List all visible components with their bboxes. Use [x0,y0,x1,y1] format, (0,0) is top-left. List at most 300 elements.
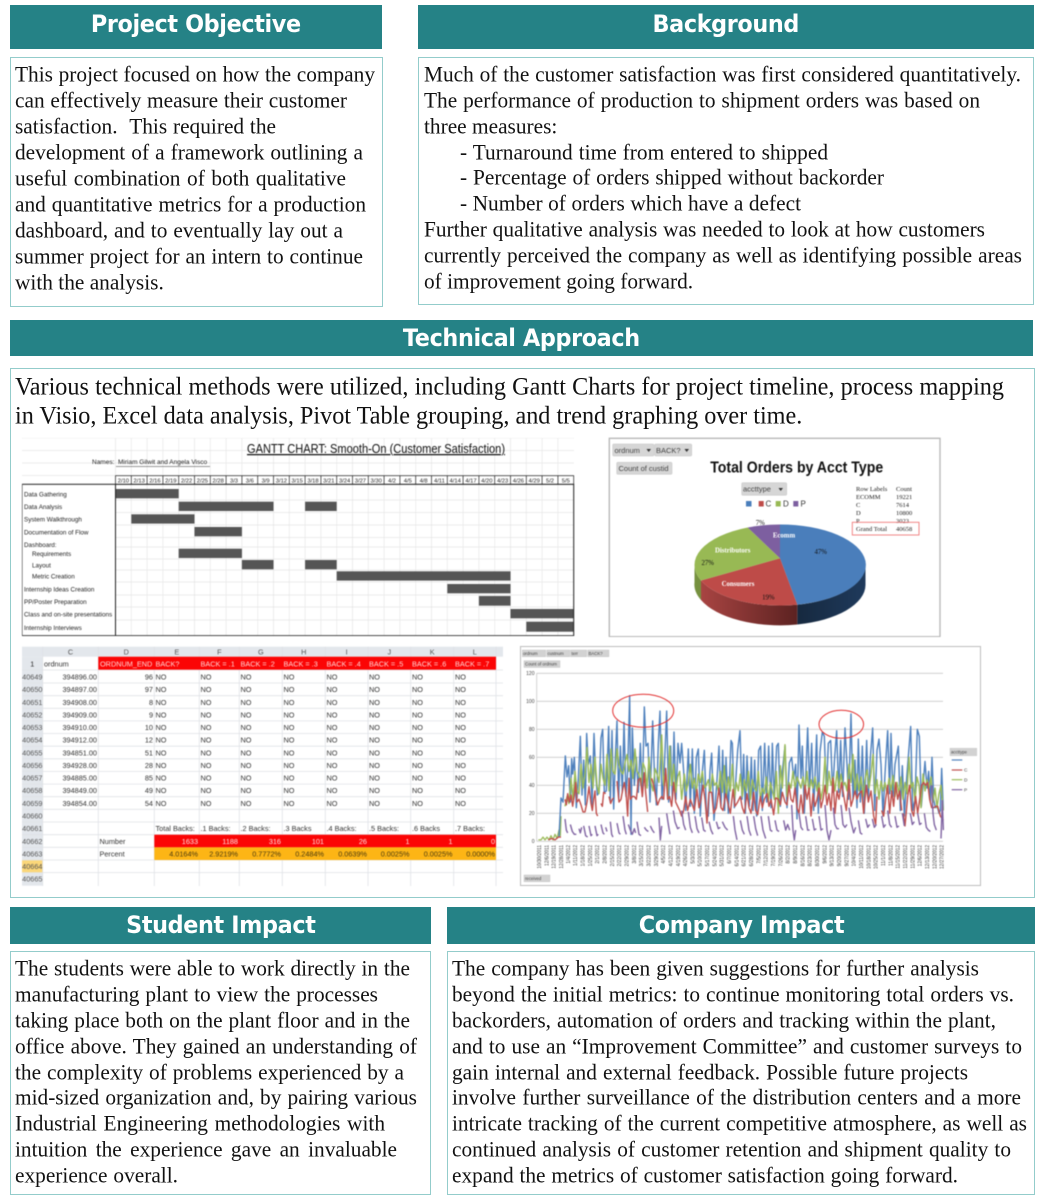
chart: orders over time line chart: 3/15/2012 [639,845,645,866]
table: Excel backorder spreadsheet: ORDNUM_END [100,660,152,668]
table: Excel backorder spreadsheet: 40652 [22,710,42,719]
chart: Gantt chart: Class and on-site presentations [24,611,112,618]
chart: pie chart Total Orders by Acct Type: 40658 [896,526,912,533]
chart: orders over time line chart: BACK? [588,651,603,656]
panel: Project Objective text [10,57,383,307]
chart: orders over time line chart: 12/19/2011 [552,845,558,869]
chart: Gantt chart: 3/21 [323,478,334,484]
chart: orders over time line chart: 2/15/2012 [610,845,616,866]
chart: orders over time line chart: 2/29/2012 [624,845,630,866]
table: Excel backorder spreadsheet: 96 [145,672,153,682]
chart: orders over time line chart: 11/15/2012 [896,845,902,869]
table: Excel backorder spreadsheet: .1 Backs: [200,824,231,833]
table: Excel backorder spreadsheet: NO [200,736,212,745]
chart: Gantt chart: 4/23 [497,478,508,484]
chart: pie chart Total Orders by Acct Type: D [783,500,789,508]
table: Excel backorder spreadsheet: 394849.00 [62,786,97,795]
table: Excel backorder spreadsheet: NO [412,710,423,719]
chart: pie chart Total Orders by Acct Type: 19% [762,594,775,602]
chart: pie chart Total Orders by Acct Type: 3023 [896,518,909,525]
panel: Project Objective text: useful combination of both qualitative [15,165,346,191]
table: Excel backorder spreadsheet: 51 [145,748,153,757]
panel: Student Impact text: intuition the experience gave an invaluable [15,1136,397,1162]
chart: Gantt chart: 2/10 [118,478,129,484]
table: Excel backorder spreadsheet: NO [240,748,252,757]
table: Excel backorder spreadsheet: NO [156,710,167,719]
chart: pie chart Total Orders by Acct Type [608,437,942,638]
chart: pie chart Total Orders by Acct Type: accttype [743,484,771,494]
heading: Student Impact [10,907,431,944]
panel: Project Objective text: This project focused on how the company [15,61,375,87]
table: Excel backorder spreadsheet: G [258,648,264,656]
table: Excel backorder spreadsheet: NO [200,799,212,808]
table: Excel backorder spreadsheet: NO [240,710,252,719]
table: Excel backorder spreadsheet: BACK? [156,660,179,668]
table: Excel backorder spreadsheet: 40655 [22,748,42,757]
table: Excel backorder spreadsheet: NO [240,736,252,745]
chart: Gantt chart: 4/5 [404,478,412,484]
chart: pie chart Total Orders by Acct Type: D [856,510,861,517]
heading: Company Impact: Company Impact [638,911,844,939]
table: Excel backorder spreadsheet: NO [455,723,466,732]
table: Excel backorder spreadsheet: NO [369,710,380,719]
chart: Gantt chart: 4/11 [434,478,445,484]
table: Excel backorder spreadsheet: 1 [448,837,452,846]
table: Excel backorder spreadsheet: NO [412,723,423,732]
chart: Gantt chart: 4/8 [420,478,428,484]
table: Excel backorder spreadsheet: NO [326,710,338,719]
table: Excel backorder spreadsheet: NO [240,786,252,795]
table: Excel backorder spreadsheet: NO [200,774,212,783]
chart: pie chart Total Orders by Acct Type: P [800,500,806,508]
chart: orders over time line chart: 5/31/2012 [720,845,726,866]
table: Excel backorder spreadsheet: Percent [100,849,125,858]
chart: orders over time line chart: 1/25/2012 [588,845,594,866]
table: Excel backorder spreadsheet: ordnum [44,660,69,668]
table: Excel backorder spreadsheet: NO [455,685,466,694]
panel: Project Objective text: can effectively measure their customer [15,87,347,113]
table: Excel backorder spreadsheet [21,646,504,886]
chart: Gantt chart: GANTT CHART: Smooth-On (Customer Satisfaction) [247,442,505,456]
panel: Project Objective text: development of a framework outlining a [15,139,363,165]
table: Excel backorder spreadsheet: NO [200,761,212,770]
chart: orders over time line chart: 40 [529,783,535,789]
chart: pie chart Total Orders by Acct Type: P [856,518,860,525]
table: Excel backorder spreadsheet: NO [240,799,252,808]
table: Excel backorder spreadsheet: NO [455,672,466,682]
table: Excel backorder spreadsheet: NO [326,786,338,795]
table: Excel backorder spreadsheet: NO [412,748,423,757]
table: Excel backorder spreadsheet: 40664 [22,862,42,871]
table: Excel backorder spreadsheet: NO [369,774,380,783]
heading: Background: Background [653,10,799,38]
chart: Gantt chart: 4/20 [481,478,492,484]
table: Excel backorder spreadsheet: 0.0025% [381,849,410,858]
table: Excel backorder spreadsheet: NO [326,774,338,783]
chart: orders over time line chart: 4/5/2012 [661,845,667,864]
table: Excel backorder spreadsheet: 10 [145,723,153,732]
table: Excel backorder spreadsheet: NO [284,710,295,719]
table: Excel backorder spreadsheet: 0.7772% [252,849,282,858]
chart: Gantt chart: Requirements [32,551,71,558]
table: Excel backorder spreadsheet: NO [326,685,338,694]
chart: orders over time line chart: 8/16/2012 [800,845,806,866]
chart: orders over time line chart: 4/12/2012 [668,845,674,866]
table: Excel backorder spreadsheet: NO [156,748,167,757]
chart: pie chart Total Orders by Acct Type: 19221 [896,494,912,501]
chart: orders over time line chart: 9/13/2012 [830,845,836,866]
table: Excel backorder spreadsheet: NO [284,736,295,745]
chart: orders over time line chart: 10/11/2012 [859,845,865,869]
chart: Gantt chart: 2/22 [181,478,192,484]
table: Excel backorder spreadsheet: NO [369,761,380,770]
chart: orders over time line chart: 8/23/2012 [808,845,814,866]
table: Excel backorder spreadsheet: I [346,648,348,656]
table: Excel backorder spreadsheet: 394910.00 [62,723,97,732]
table: Excel backorder spreadsheet: 40650 [22,685,42,694]
chart: Gantt chart: 2/13 [134,478,145,484]
chart: orders over time line chart [520,646,982,886]
text block: technical methods [15,372,1004,430]
panel: Company Impact text: gain internal and external feedback. Possible future projects [452,1059,968,1085]
text block: technical methods: in Visio, Excel data analysis, Pivot Table grouping, and trend graphing over time. [15,401,802,430]
table: Excel backorder spreadsheet: BACK = .2 [240,660,275,668]
table: Excel backorder spreadsheet: 40649 [22,672,42,682]
table: Excel backorder spreadsheet: NO [369,786,380,795]
heading: Technical Approach: Technical Approach [403,324,640,352]
table: Excel backorder spreadsheet: NO [284,748,295,757]
chart: orders over time line chart: 4/19/2012 [676,845,682,866]
table: Excel backorder spreadsheet: NO [156,698,167,707]
panel: Student Impact text: experience overall. [15,1162,178,1188]
chart: orders over time line chart: 3/22/2012 [646,845,652,866]
table: Excel backorder spreadsheet: F [217,648,222,656]
chart: Gantt chart: 3/24 [339,478,351,484]
panel: Company Impact text: and to use an “Improvement Committee” and customer surveys to [452,1033,1022,1059]
table: Excel backorder spreadsheet: BACK = .7 [455,660,489,668]
chart: orders over time line chart: 7/5/2012 [756,845,762,864]
panel: Project Objective text: summer project for an intern to continue [15,243,363,269]
chart: orders over time line chart: 10/4/2012 [852,845,858,866]
chart: orders over time line chart: 5/24/2012 [712,845,718,866]
table: Excel backorder spreadsheet: 40659 [22,799,42,808]
table: Excel backorder spreadsheet: NO [200,698,212,707]
table: Excel backorder spreadsheet: NO [455,761,466,770]
chart: orders over time line chart: 2/1/2012 [595,845,601,864]
panel: Background text: Further qualitative analysis was needed to look at how customers [424,216,985,242]
table: Excel backorder spreadsheet: NO [240,672,252,682]
chart: orders over time line chart: 5/10/2012 [698,845,704,866]
chart: Gantt chart: System Walkthrough [24,517,82,524]
table: Excel backorder spreadsheet: 394897.00 [62,685,97,694]
table: Excel backorder spreadsheet: NO [412,685,423,694]
chart: pie chart Total Orders by Acct Type: Total Orders by Acct Type [710,460,883,476]
chart: Gantt chart: 4/2 [388,478,396,484]
text block: technical methods: Various technical methods were utilized, including Gantt Charts for project timeline, process mapping [15,372,1004,401]
table: Excel backorder spreadsheet: 1 [30,660,34,668]
chart: orders over time line chart: 11/22/2012 [903,845,909,869]
chart: orders over time line chart: 5/3/2012 [690,845,696,864]
table: Excel backorder spreadsheet: 40660 [22,812,42,820]
table: Excel backorder spreadsheet: J [387,648,391,656]
chart: orders over time line chart: D [964,777,968,783]
chart: orders over time line chart: 2/22/2012 [617,845,623,866]
table: Excel backorder spreadsheet: NO [156,736,167,745]
table: Excel backorder spreadsheet: 394909.00 [62,710,97,719]
chart: Gantt chart: 4/29 [529,478,540,484]
table: Excel backorder spreadsheet: NO [412,786,423,795]
table: Excel backorder spreadsheet: 40656 [22,761,42,770]
chart: orders over time line chart: 8/30/2012 [815,845,821,866]
chart: orders over time line chart: 9/6/2012 [822,845,828,864]
table: Excel backorder spreadsheet: NO [284,672,295,682]
chart: orders over time line chart: 6/28/2012 [749,845,755,866]
table: Excel backorder spreadsheet: NO [326,736,338,745]
chart: pie chart Total Orders by Acct Type: 7% [756,520,765,527]
panel: Company Impact text: intricate tracking of the current competitive atmosphere, as well as [452,1110,1027,1136]
chart: Gantt chart: 3/3 [230,478,238,484]
table: Excel backorder spreadsheet: NO [284,723,295,732]
table: Excel backorder spreadsheet: 54 [145,799,153,808]
panel: Project Objective text: dashboard, and to eventually lay out a [15,217,343,243]
table: Excel backorder spreadsheet: 28 [145,761,153,770]
table: Excel backorder spreadsheet: BACK = .4 [326,660,361,668]
panel: Background text: - Percentage of orders shipped without backorder [460,164,884,190]
table: Excel backorder spreadsheet: 1 [405,837,410,846]
panel: Background text: The performance of production to shipment orders was based on [424,87,980,113]
chart: Gantt chart: 2/28 [213,478,224,484]
chart: pie chart Total Orders by Acct Type: C [856,502,860,509]
chart: Gantt chart: Data Gathering [24,492,67,498]
table: Excel backorder spreadsheet: NO [284,786,295,795]
table: Excel backorder spreadsheet: BACK = .3 [284,660,318,668]
chart: orders over time line chart: custnum [548,651,564,656]
chart: orders over time line chart: 8/2/2012 [786,845,792,864]
chart: orders over time line chart: 7/26/2012 [778,845,784,866]
table: Excel backorder spreadsheet: K [430,648,435,656]
chart: Gantt chart: 3/27 [355,478,366,484]
chart: pie chart Total Orders by Acct Type: Consumers [722,581,755,588]
chart: Gantt chart: 3/12 [276,478,287,484]
table: Excel backorder spreadsheet: NO [412,774,423,783]
table: Excel backorder spreadsheet: Total Backs: [156,824,195,833]
chart: pie chart Total Orders by Acct Type: ECOMM [856,494,881,501]
table: Excel backorder spreadsheet: NO [200,685,212,694]
chart: orders over time line chart: terr [572,651,579,656]
chart: pie chart Total Orders by Acct Type: Count [896,486,912,493]
chart: Gantt chart: 2/16 [149,478,161,484]
chart: pie chart Total Orders by Acct Type: Ecomm [773,532,795,540]
chart: pie chart Total Orders by Acct Type: 27% [701,560,714,567]
table: Excel backorder spreadsheet: 40663 [22,849,42,858]
table: Excel backorder spreadsheet: 85 [145,774,153,783]
table: Excel backorder spreadsheet: NO [412,672,423,682]
panel: Company Impact text: backorders, automation of orders and tracking within the plant, [452,1007,996,1033]
table: Excel backorder spreadsheet: NO [284,774,295,783]
table: Excel backorder spreadsheet: E [174,648,179,656]
chart: orders over time line chart: 6/21/2012 [742,845,748,866]
table: Excel backorder spreadsheet: 1188 [222,837,238,846]
table: Excel backorder spreadsheet: NO [455,774,466,783]
table: Excel backorder spreadsheet: 4.0164% [169,849,199,858]
table: Excel backorder spreadsheet: BACK = .1 [200,660,235,668]
table: Excel backorder spreadsheet: .4 Backs: [326,824,357,833]
table: Excel backorder spreadsheet: 394851.00 [62,748,97,757]
panel: Student Impact text: taking place both on the plant floor and in the [15,1007,410,1033]
table: Excel backorder spreadsheet: D [124,648,129,656]
table: Excel backorder spreadsheet: 40662 [22,837,42,846]
table: Excel backorder spreadsheet: L [473,648,477,656]
table: Excel backorder spreadsheet: NO [156,761,167,770]
table: Excel backorder spreadsheet: 316 [269,837,281,846]
table: Excel backorder spreadsheet: 9 [149,710,153,719]
table: Excel backorder spreadsheet: NO [412,761,423,770]
chart: orders over time line chart: 1/18/2012 [580,845,587,866]
chart: orders over time line chart: 60 [529,755,535,761]
table: Excel backorder spreadsheet: NO [455,748,466,757]
table: Excel backorder spreadsheet: 97 [145,685,153,694]
panel: Background text: - Turnaround time from entered to shipped [460,139,828,165]
chart: Gantt chart: Miriam Gilwit and Angela Visco [118,459,207,466]
table: Excel backorder spreadsheet: 2.9219% [209,849,239,858]
table: Excel backorder spreadsheet: NO [156,799,167,808]
table: Excel backorder spreadsheet: C [68,648,73,656]
chart: Gantt chart: Metric Creation [32,574,75,580]
table: Excel backorder spreadsheet: NO [455,736,466,745]
chart: Gantt chart: PP/Poster Preparation [24,599,87,606]
chart: pie chart Total Orders by Acct Type: 10800 [896,510,912,517]
chart: Gantt chart: Layout [32,562,51,569]
chart: Gantt chart: Dashboard: [24,542,57,549]
chart: orders over time line chart: ordnum [523,651,538,656]
table: Excel backorder spreadsheet: 40653 [22,723,42,732]
panel: Student Impact text: Industrial Engineering methodologies with [15,1110,385,1136]
chart: orders over time line chart: 11/1/2012 [881,845,887,866]
table: Excel backorder spreadsheet: 40651 [22,698,42,707]
table: Excel backorder spreadsheet: NO [412,799,423,808]
chart: pie chart Total Orders by Acct Type: Row Labels [856,486,888,493]
table: Excel backorder spreadsheet: 0.0639% [338,849,368,858]
chart: orders over time line chart: 10/25/2012 [874,845,880,869]
table: Excel backorder spreadsheet: 1633 [182,837,198,846]
chart: orders over time line chart: 12/20/2012 [932,845,938,869]
table: Excel backorder spreadsheet: 394908.00 [62,698,97,707]
chart: orders over time line chart: 9/20/2012 [837,845,843,866]
panel: Company Impact text: The company has been given suggestions for further analysis [452,955,979,981]
table: Excel backorder spreadsheet: 394885.00 [62,774,97,783]
table: Excel backorder spreadsheet: .3 Backs [284,824,312,833]
chart: orders over time line chart: 10/30/2011 [537,845,543,869]
chart: orders over time line chart: C [964,768,968,774]
table: Excel backorder spreadsheet: .6 Backs [412,824,440,833]
panel: Background text: Much of the customer satisfaction was first considered quantitatively. [424,61,1021,87]
chart: orders over time line chart: 12/28/2011 [559,845,565,869]
chart: orders over time line chart: 120 [526,671,535,677]
table: Excel backorder spreadsheet: NO [200,672,212,682]
table: Excel backorder spreadsheet: NO [369,672,380,682]
table: Excel backorder spreadsheet: NO [326,723,338,732]
table: Excel backorder spreadsheet: NO [455,786,466,795]
chart: orders over time line chart: 6/14/2012 [734,845,740,866]
chart: orders over time line chart: 12/27/2012 [940,845,946,869]
chart: orders over time line chart: 9/27/2012 [844,845,850,866]
chart: orders over time line chart: 5/17/2012 [705,845,711,866]
chart: orders over time line chart: 7/12/2012 [764,845,770,866]
chart: Gantt chart: Names: [92,459,115,466]
table: Excel backorder spreadsheet: NO [240,685,252,694]
chart: orders over time line chart: 3/29/2012 [654,845,660,866]
chart: Gantt chart: 2/25 [197,478,208,484]
table: Excel backorder spreadsheet: 40658 [22,786,42,795]
chart: orders over time line chart: P [964,787,967,793]
panel: Student Impact text: the complexity of problems experienced by a [15,1059,404,1085]
table: Excel backorder spreadsheet: NO [284,761,295,770]
chart: pie chart Total Orders by Acct Type: C [766,500,772,508]
chart: orders over time line chart: Count of ordnum [525,662,557,666]
heading: Technical Approach [10,320,1033,356]
chart: orders over time line chart: 4/26/2012 [683,845,689,866]
table: Excel backorder spreadsheet: NO [200,748,212,757]
table: Excel backorder spreadsheet: NO [412,736,423,745]
panel: Company Impact text: involve further surveillance of the distribution centers and a more [452,1084,1021,1110]
table: Excel backorder spreadsheet: NO [240,723,252,732]
panel: Student Impact text: The students were able to work directly in the [15,955,410,981]
table: Excel backorder spreadsheet: 40654 [22,736,42,745]
chart: Gantt chart [21,438,575,637]
chart: Gantt chart: 3/15 [292,478,303,484]
panel: Background text: of improvement going forward. [424,268,693,294]
chart: Gantt chart: Data Analysis [24,504,62,511]
panel: Company Impact text: expand the metrics of customer satisfaction going forward. [452,1162,958,1188]
chart: Gantt chart: 3/30 [371,478,382,484]
table: Excel backorder spreadsheet: 8 [149,698,153,707]
chart: orders over time line chart: 2/8/2012 [602,845,609,864]
table: Excel backorder spreadsheet: NO [156,786,167,795]
panel: Background text: - Number of orders which have a defect [460,190,801,216]
chart: orders over time line chart: received [525,876,542,881]
table: Excel backorder spreadsheet: NO [156,774,167,783]
heading: Company Impact [447,907,1035,944]
table: Excel backorder spreadsheet: NO [369,723,380,732]
chart: Gantt chart: 4/17 [465,478,477,484]
table: Excel backorder spreadsheet: NO [369,799,380,808]
chart: pie chart Total Orders by Acct Type: ordnum [614,446,640,455]
table: Excel backorder spreadsheet: 0.0025% [424,849,453,858]
chart: pie chart Total Orders by Acct Type: 7614 [896,502,910,509]
table: Excel backorder spreadsheet: .2 Backs: [240,824,271,833]
heading: Background [418,5,1034,49]
chart: orders over time line chart: accttype [951,750,968,754]
chart: orders over time line chart: 12/6/2011 [544,845,550,866]
table: Excel backorder spreadsheet: 394896.00 [62,672,97,682]
table: Excel backorder spreadsheet: 101 [312,837,324,846]
chart: orders over time line chart: 1/11/2012 [573,845,579,866]
table: Excel backorder spreadsheet: BACK = .5 [369,660,403,668]
table: Excel backorder spreadsheet: NO [369,736,380,745]
panel: Project Objective text: with the analysis. [15,269,164,295]
panel: Student Impact text: mid-sized organization and, by pairing various [15,1084,417,1110]
chart: pie chart Total Orders by Acct Type: Distributors [715,548,751,554]
table: Excel backorder spreadsheet: NO [156,672,167,682]
table: Excel backorder spreadsheet: 394928.00 [62,761,97,770]
table: Excel backorder spreadsheet: NO [284,698,295,707]
chart: Gantt chart: Documentation of Flow [24,529,89,536]
table: Excel backorder spreadsheet: .7 Backs: [455,824,485,833]
table: Excel backorder spreadsheet: Number [100,837,126,846]
chart: orders over time line chart: 12/13/2012 [925,845,931,869]
table: Excel backorder spreadsheet: NO [455,710,466,719]
table: Excel backorder spreadsheet: NO [455,698,466,707]
